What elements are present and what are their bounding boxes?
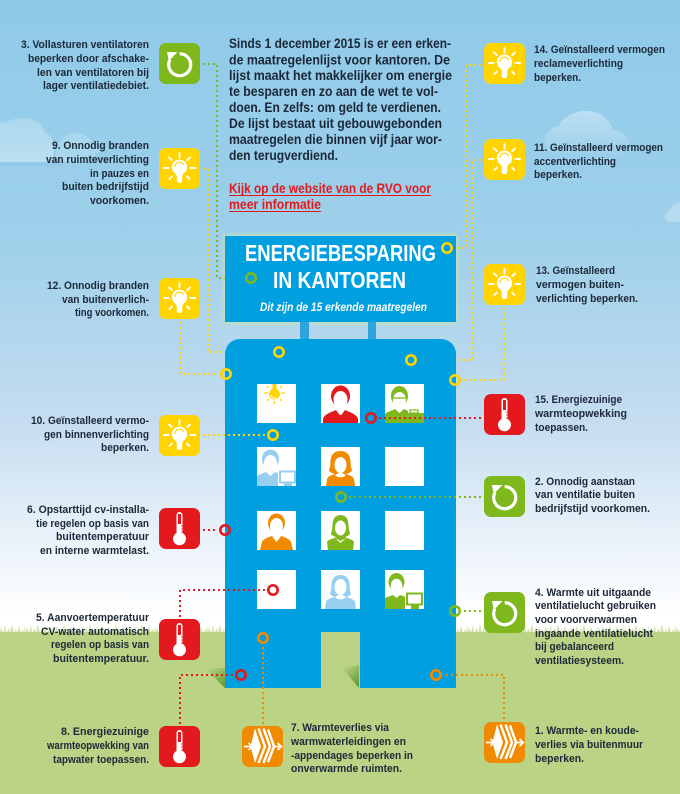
- cloud right: [545, 111, 629, 154]
- connector: 3: [203, 64, 243, 278]
- measure 9: van ruimteverlichting: [46, 154, 149, 166]
- connector: 15: [379, 417, 481, 419]
- connector: 14: [455, 65, 481, 248]
- measure 13: vermogen buiten-: [536, 279, 624, 291]
- measure 4: ventilatielucht gebruiken: [535, 600, 656, 612]
- measure 2: van ventilatie buiten: [535, 489, 635, 501]
- measure 6: tie regelen op basis van: [36, 518, 149, 530]
- window: man green with monitor: [385, 570, 424, 609]
- measure 8: 8. Energiezuinige: [61, 726, 149, 738]
- window: man red: [321, 384, 360, 423]
- connector: 4: [463, 610, 481, 612]
- window: woman green: [321, 511, 360, 550]
- window: woman orange: [321, 447, 360, 486]
- icon: thermometer: [159, 726, 200, 767]
- measure 6: buitentemperatuur: [56, 531, 150, 543]
- connector: 10: [203, 434, 265, 436]
- measure 7: 7. Warmteverlies via: [291, 722, 390, 734]
- measure 15: toepassen.: [535, 422, 588, 434]
- measure 14: reclameverlichting: [534, 58, 623, 70]
- measure 2: [484, 476, 650, 517]
- measure 4: ingaande ventilatielucht: [535, 628, 653, 640]
- icon: ventilation cycle: [484, 476, 525, 517]
- building shadow door: [342, 665, 359, 688]
- measure 3: len van ventilatoren bij: [37, 67, 149, 79]
- measure 12: van buitenverlich-: [62, 294, 149, 306]
- connector: 9: [203, 169, 271, 352]
- measure 1: 1. Warmte- en koude-: [535, 725, 639, 737]
- connector: 1: [444, 675, 504, 719]
- measure 10: gen binnenverlichting: [44, 429, 149, 441]
- measure 14: 14. Geïnstalleerd vermogen: [534, 44, 665, 56]
- measure 3: lager ventilatiedebiet.: [43, 80, 149, 92]
- measure 11: 11. Geïnstalleerd vermogen: [534, 142, 663, 154]
- intro text: De lijst bestaat uit gebouwgebonden: [229, 116, 442, 131]
- measure 5: buitentemperatuur.: [53, 653, 149, 665]
- measure 14: [484, 43, 665, 84]
- ground: [0, 620, 680, 794]
- measure 9: buiten bedrijfstijd: [62, 181, 149, 193]
- measure 10: [31, 415, 200, 456]
- measure 11: beperken.: [534, 169, 582, 181]
- measure 5: CV-water automatisch: [41, 626, 149, 638]
- measure 1: verlies via buitenmuur: [535, 739, 644, 751]
- window: empty 2: [385, 511, 424, 550]
- measure 7: onverwarmde ruimten.: [291, 763, 402, 775]
- measure 1: [484, 722, 644, 765]
- window: empty 1: [385, 447, 424, 486]
- window: man orange: [257, 511, 296, 550]
- measure 3: beperken door afschake-: [28, 53, 149, 65]
- measure 6: en interne warmtelast.: [40, 545, 149, 557]
- link text: [229, 181, 432, 212]
- connector: 2: [349, 496, 481, 498]
- measure 4: [484, 587, 656, 667]
- link text: Kijk op de website van de RVO voor: [229, 181, 432, 196]
- intro text: lijst maakt het makkelijker om energie: [229, 68, 452, 83]
- measure 11: [484, 139, 663, 181]
- icon: light bulb: [159, 415, 200, 456]
- icon: light bulb: [159, 148, 200, 189]
- connector: 8: [180, 675, 233, 724]
- icon: ventilation cycle: [484, 592, 525, 633]
- connector: 7: [262, 646, 264, 724]
- link text: meer informatie: [229, 197, 321, 212]
- measure 1: beperken.: [535, 753, 584, 765]
- intro text: [229, 36, 452, 163]
- measure 12: [47, 278, 200, 319]
- icon: thermometer: [159, 619, 200, 660]
- measure 9: in pauzes en: [90, 168, 149, 180]
- measure 7: warmwaterleidingen en: [290, 736, 406, 748]
- window: woman blue: [321, 570, 360, 609]
- measure 12: 12. Onnodig branden: [47, 280, 149, 292]
- intro text: te besparen en zo aan de wet te vol-: [229, 84, 438, 99]
- measure 14: beperken.: [534, 72, 581, 84]
- measure 12: ting voorkomen.: [75, 307, 149, 319]
- measure 3: 3. Vollasturen ventilatoren: [21, 39, 149, 51]
- measure 11: accentverlichting: [534, 156, 616, 168]
- connector: 5: [180, 590, 265, 617]
- measure 9: [46, 140, 200, 207]
- measure 5: regelen op basis van: [51, 639, 149, 651]
- sign glow: [224, 235, 457, 323]
- window: lamp: [257, 384, 296, 423]
- connector: 6: [203, 529, 218, 531]
- intro text: Sinds 1 december 2015 is er een erken-: [229, 36, 451, 51]
- subtitle: Dit zijn de 15 erkende maatregelen: [260, 302, 427, 314]
- connector: 11: [419, 160, 481, 360]
- measure 8: warmteopwekking van: [46, 740, 149, 752]
- measure 15: 15. Energiezuinige: [535, 394, 622, 406]
- title: [245, 240, 436, 293]
- icon: thermometer: [159, 508, 200, 549]
- intro text: den terugverdiend.: [229, 148, 338, 163]
- window: empty 3: [257, 570, 296, 609]
- connector: 13: [463, 308, 504, 380]
- title: ENERGIEBESPARING: [245, 240, 436, 266]
- window: man with glasses and briefcase: [385, 384, 424, 423]
- measure 5: 5. Aanvoertemperatuur: [36, 612, 150, 624]
- measure 7: [242, 722, 413, 775]
- measure 5: [36, 612, 200, 665]
- measure 3: [21, 39, 200, 92]
- measure 4: 4. Warmte uit uitgaande: [535, 587, 651, 599]
- intro text: de maatregelenlijst voor kantoren. De: [229, 52, 450, 68]
- measure 9: voorkomen.: [90, 195, 149, 207]
- measure 10: beperken.: [101, 442, 149, 454]
- measure 10: 10. Geïnstalleerd vermo-: [31, 415, 149, 427]
- measure 6: 6. Opstarttijd cv-installa-: [27, 504, 149, 516]
- sign: title board: [225, 236, 456, 322]
- building: [225, 339, 456, 688]
- intro text: doen. En zelfs: om geld te verdienen.: [229, 100, 441, 115]
- icon: wall insulation: [484, 722, 525, 763]
- measure 9: 9. Onnodig branden: [52, 140, 149, 152]
- measure 4: voor voorverwarmen: [535, 614, 637, 626]
- building shadow left: [205, 668, 225, 688]
- measure 2: 2. Onnodig aanstaan: [535, 476, 635, 488]
- measure 2: bedrijfstijd voorkomen.: [535, 503, 650, 515]
- icon: light bulb: [484, 264, 525, 305]
- measure 7: -appendages beperken in: [291, 750, 413, 762]
- icon: ventilation cycle: [159, 43, 200, 84]
- measure 4: ventilatiesysteem.: [535, 655, 624, 667]
- cloud left: [0, 118, 100, 166]
- measure 8: tapwater toepassen.: [53, 754, 149, 766]
- connector: 12: [180, 322, 218, 374]
- measure 15: [484, 394, 627, 435]
- icon: thermometer: [484, 394, 525, 435]
- cloud right edge: [665, 202, 680, 222]
- measure 13: 13. Geïnstalleerd: [536, 265, 615, 277]
- measure 13: [484, 264, 638, 305]
- window: man light blue with monitor: [257, 447, 296, 486]
- measure 8: [46, 726, 200, 767]
- connector markers: [220, 243, 460, 680]
- icon: light bulb: [159, 278, 200, 319]
- icon: wall insulation: [242, 726, 283, 767]
- icon: light bulb: [484, 139, 525, 180]
- measure 6: [27, 504, 200, 557]
- title: IN KANTOREN: [273, 267, 406, 293]
- measure 15: warmteopwekking: [534, 408, 627, 420]
- icon: light bulb: [484, 43, 525, 84]
- background: sky: [0, 0, 680, 632]
- intro text: maatregelen die binnen vijf jaar wor-: [229, 132, 442, 147]
- measure 13: verlichting beperken.: [536, 293, 638, 305]
- sign posts: [300, 322, 376, 340]
- measure 4: bij gebalanceerd: [535, 641, 614, 653]
